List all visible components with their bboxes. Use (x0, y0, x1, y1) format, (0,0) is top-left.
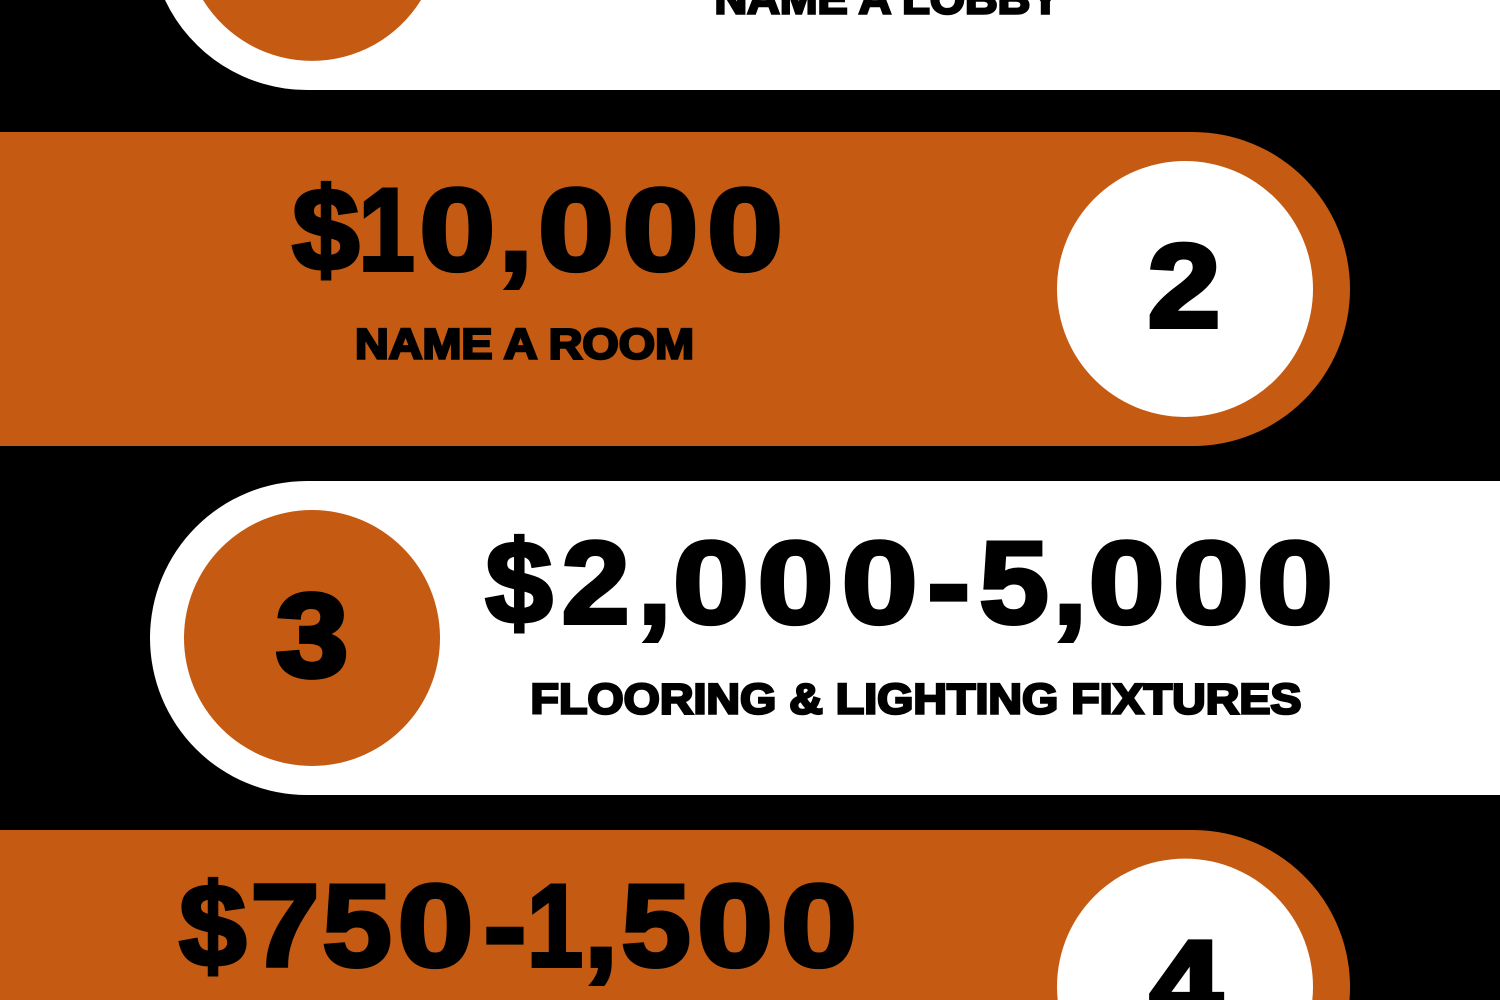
amount: $10,000: , (499, 164, 532, 295)
number badge 4 (1057, 859, 1313, 1000)
amount: $10,000: 0 (622, 164, 698, 295)
amount: $750-1,500: 0 (398, 860, 474, 991)
amount: $10,000: 0 (538, 164, 614, 295)
amount: $2,000-5,000: 0 (1089, 517, 1165, 648)
number badge 2 (1057, 161, 1313, 417)
amount: $2,000-5,000: , (1053, 517, 1087, 648)
number badge 1 circle (203, 0, 421, 61)
number badge 3: 3 (276, 570, 348, 702)
amount: $2,000-5,000: 0 (842, 517, 918, 648)
amount: $2,000-5,000: 0 (758, 517, 834, 648)
panel: tier 1 white band (165, 0, 1500, 90)
amount: $750-1,500: 5 (322, 860, 392, 991)
amount: $2,000-5,000: 0 (1173, 517, 1249, 648)
amount: $10,000: 0 (707, 164, 783, 295)
amount: $750-1,500: 0 (697, 860, 773, 991)
amount: $750-1,500: 1 (527, 860, 583, 991)
panel: tier 2 orange band (0, 132, 1350, 446)
panel: tier 4 orange band (0, 830, 1350, 1000)
amount: $2,000-5,000: 0 (673, 517, 749, 648)
amount: $2,000-5,000: , (638, 517, 671, 648)
amount: $750-1,500: , (584, 860, 618, 991)
number badge 2: 2 (1148, 221, 1220, 352)
amount: $10,000: 1 (359, 164, 415, 295)
panel: tier 3 white band (150, 481, 1500, 795)
number badge 3 (184, 510, 440, 766)
amount: $750-1,500: 7 (250, 860, 320, 991)
amount: $2,000-5,000: 0 (1257, 517, 1333, 648)
amount: $2,000-5,000: 5 (979, 517, 1049, 648)
amount: $2,000-5,000: $ (486, 517, 552, 648)
amount: $750-1,500: - (484, 860, 526, 991)
amount: $750-1,500: $ (179, 860, 246, 991)
amount: $750-1,500: 5 (621, 860, 691, 991)
amount: $750-1,500: 0 (781, 860, 857, 991)
amount: $2,000-5,000: - (927, 517, 970, 648)
amount: $10,000: 0 (419, 164, 495, 295)
label: flooring and lighting fixtures: FLOORING & LIGHTING FIXTURES (530, 676, 1302, 724)
amount: $2,000-5,000: 2 (562, 517, 630, 648)
amount: $10,000: $ (292, 164, 359, 295)
label: name a room: NAME A ROOM (355, 320, 694, 368)
